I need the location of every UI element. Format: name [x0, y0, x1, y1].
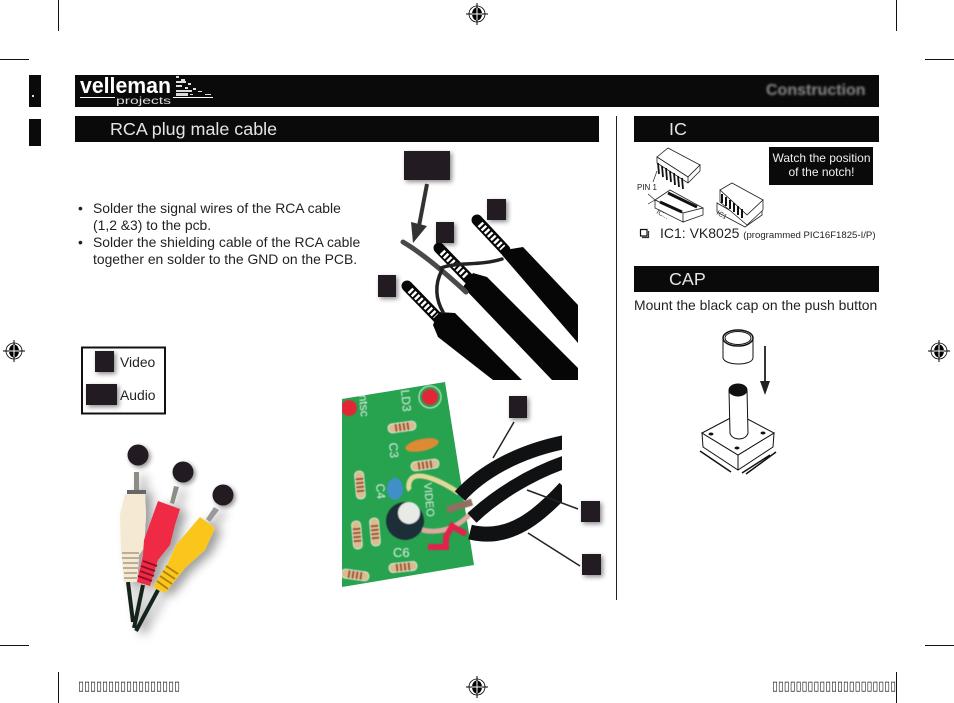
- legend: [82, 348, 165, 414]
- footer left code: ▯▯▯▯▯▯▯▯▯▯▯▯▯▯▯▯▯: [78, 679, 180, 694]
- silkscreen and parts: VIDEO: [421, 482, 436, 518]
- yellow plug: [153, 507, 219, 593]
- registration mark right: [928, 340, 950, 362]
- plug number dot 3: [212, 484, 234, 506]
- logo: velleman projects: [80, 73, 213, 107]
- page tab marks: [29, 75, 41, 146]
- label box middle: [581, 501, 600, 522]
- legend: Audio: [120, 387, 156, 403]
- instructions text: •: [78, 234, 83, 250]
- silkscreen and parts: C4: [373, 483, 388, 500]
- banner title: Construction: [766, 82, 866, 99]
- leader line to box 2: [527, 490, 578, 509]
- green board: [342, 382, 474, 587]
- plug number dot 1: [128, 444, 148, 466]
- registration mark left: [3, 340, 25, 362]
- heading: RCA plug male cable: [75, 116, 599, 142]
- heading: RCA plug male cable: RCA plug male cable: [110, 119, 277, 139]
- socket: [655, 190, 703, 213]
- logo: velleman projects: projects: [116, 95, 171, 107]
- PCB photo: [341, 382, 565, 587]
- seated chip base: [717, 203, 762, 227]
- registration mark top: [466, 3, 488, 25]
- chip above socket: [657, 148, 700, 177]
- IC socket drawing: [655, 148, 763, 227]
- silkscreen and parts: LD3: [398, 389, 414, 413]
- column divider: [616, 116, 618, 600]
- heading: CAP: CAP: [669, 269, 706, 289]
- black cables: [460, 442, 565, 534]
- shielding wires: [403, 242, 502, 312]
- seated chip: [720, 183, 763, 215]
- label box: 2: [436, 222, 454, 243]
- cords: [128, 582, 158, 631]
- push button drawing: [700, 384, 776, 474]
- label box: 3: [487, 199, 506, 220]
- silkscreen and parts: C3: [386, 442, 401, 459]
- footer right code: ▯▯▯▯▯▯▯▯▯▯▯▯▯▯▯▯▯▯▯▯▯: [772, 679, 896, 694]
- cable jackets: [433, 247, 578, 380]
- white plug: [120, 472, 146, 582]
- resistors: [388, 421, 416, 433]
- notch callout: Watch the position: [772, 151, 870, 165]
- instructions text: Solder the signal wires of the RCA cable: [93, 200, 341, 216]
- IC1 labels: IC...: [655, 209, 670, 221]
- plug number dot 2: [172, 462, 194, 482]
- instructions text: [78, 200, 360, 267]
- label box bottom: [582, 554, 601, 575]
- silkscreen and parts: C6: [393, 545, 410, 560]
- down arrow: [760, 346, 770, 395]
- instructions text: together en solder to the GND on the PCB.: [93, 251, 357, 267]
- RCA plugs photo: [120, 472, 219, 631]
- silkscreen and parts: [341, 386, 472, 581]
- notch callout: [769, 147, 873, 185]
- instructions text: Solder the shielding cable of the RCA cable: [93, 234, 360, 250]
- cable illustration: [403, 220, 578, 380]
- cap drawing: [723, 330, 753, 364]
- leader line to box 1: [493, 422, 514, 458]
- heading: IC: IC: [669, 119, 687, 139]
- IC1 labels: [655, 209, 728, 221]
- hatched wire tips: [407, 220, 505, 318]
- IC1 labels: IC1: [715, 210, 728, 221]
- cap instruction: Mount the black cap on the push button: [634, 297, 877, 313]
- notch callout: of the notch!: [788, 165, 855, 179]
- arrow to GND label: [411, 184, 427, 243]
- heading: IC: [634, 116, 879, 142]
- instructions text: •: [78, 200, 83, 216]
- label box: 1: [378, 275, 396, 297]
- logo: velleman projects: velleman: [80, 73, 171, 98]
- leader line to box 3: [528, 533, 580, 566]
- registration mark bottom: [466, 676, 488, 698]
- instructions text: (1,2 &3) to the pcb.: [93, 217, 211, 233]
- PIN 1 label: PIN 1: [637, 183, 658, 192]
- pin 1 leader lines: [648, 171, 657, 204]
- red plug: [137, 486, 180, 586]
- label box: GND: [404, 151, 450, 180]
- IC1 part line: IC1: VK8025 (programmed PIC16F1825-I/P): [660, 225, 876, 241]
- legend: Video: [120, 354, 156, 370]
- silkscreen and parts: ntsc: [356, 394, 372, 417]
- top banner: [75, 73, 879, 107]
- electrolytic capacitor: [386, 502, 424, 540]
- heading: CAP: [634, 266, 879, 292]
- label box top: [509, 396, 527, 418]
